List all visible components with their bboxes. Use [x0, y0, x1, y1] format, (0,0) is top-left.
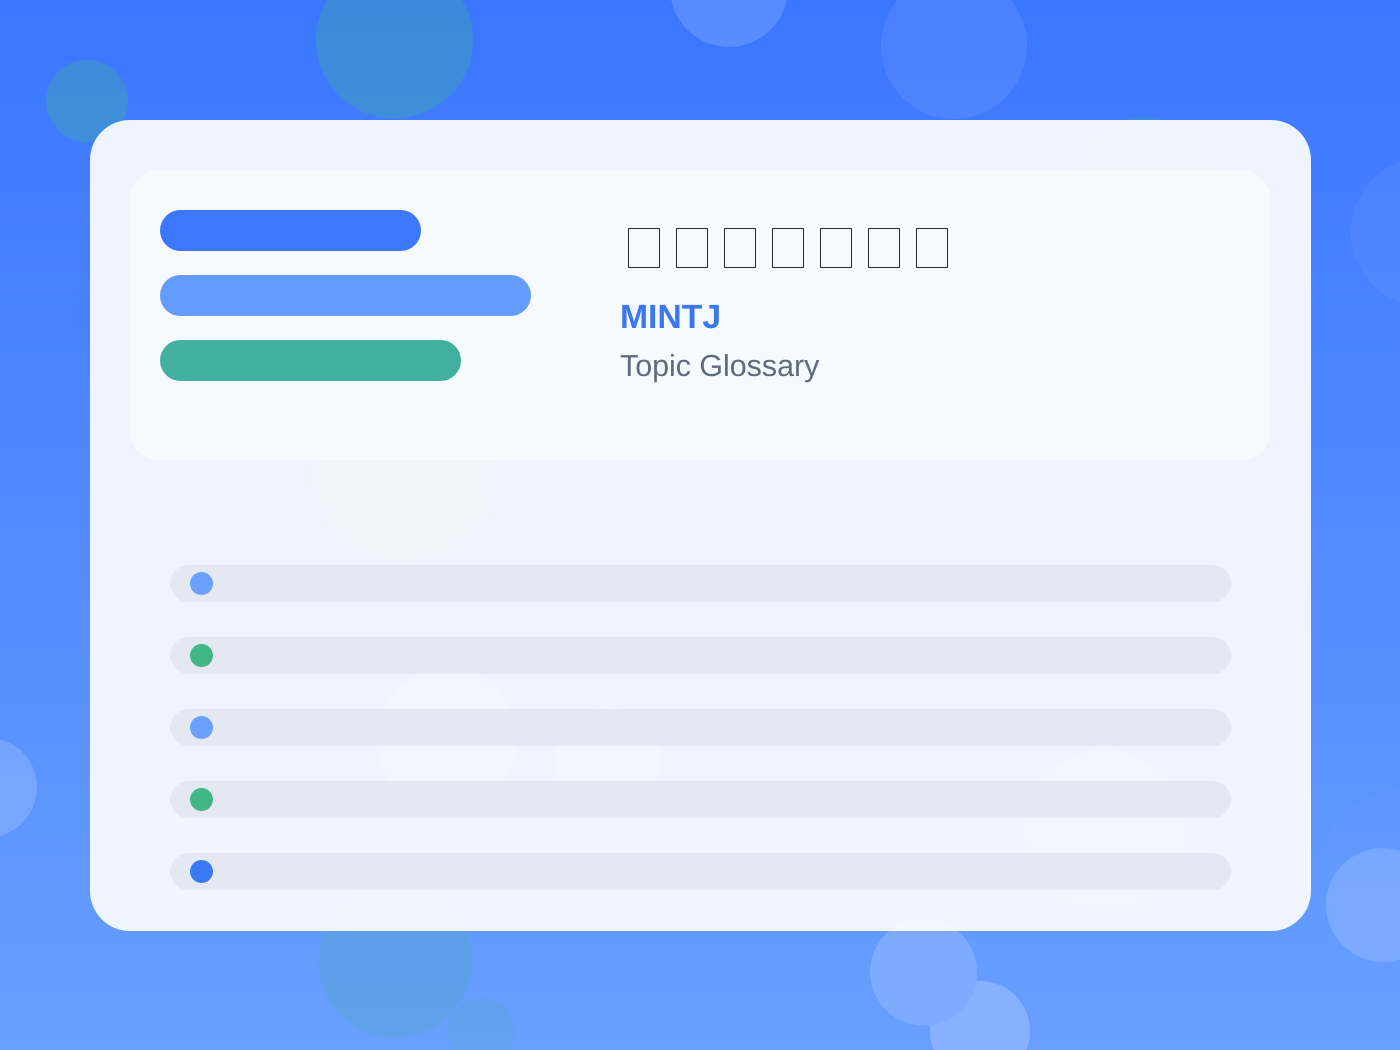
header panel: [130, 170, 1270, 460]
row 4: [170, 781, 1231, 818]
brand name: MINTJ: [620, 298, 721, 336]
decorative pills: [160, 210, 531, 381]
row 5: [170, 853, 1231, 890]
row 3: [170, 709, 1231, 746]
row 1: [170, 565, 1231, 602]
subtitle: Topic Glossary: [620, 349, 820, 383]
glossary rows: [170, 565, 1231, 890]
title: missing-glyph boxes: [628, 228, 948, 268]
panel background: [130, 170, 1270, 460]
row 2: [170, 637, 1231, 674]
main card: [90, 120, 1311, 931]
